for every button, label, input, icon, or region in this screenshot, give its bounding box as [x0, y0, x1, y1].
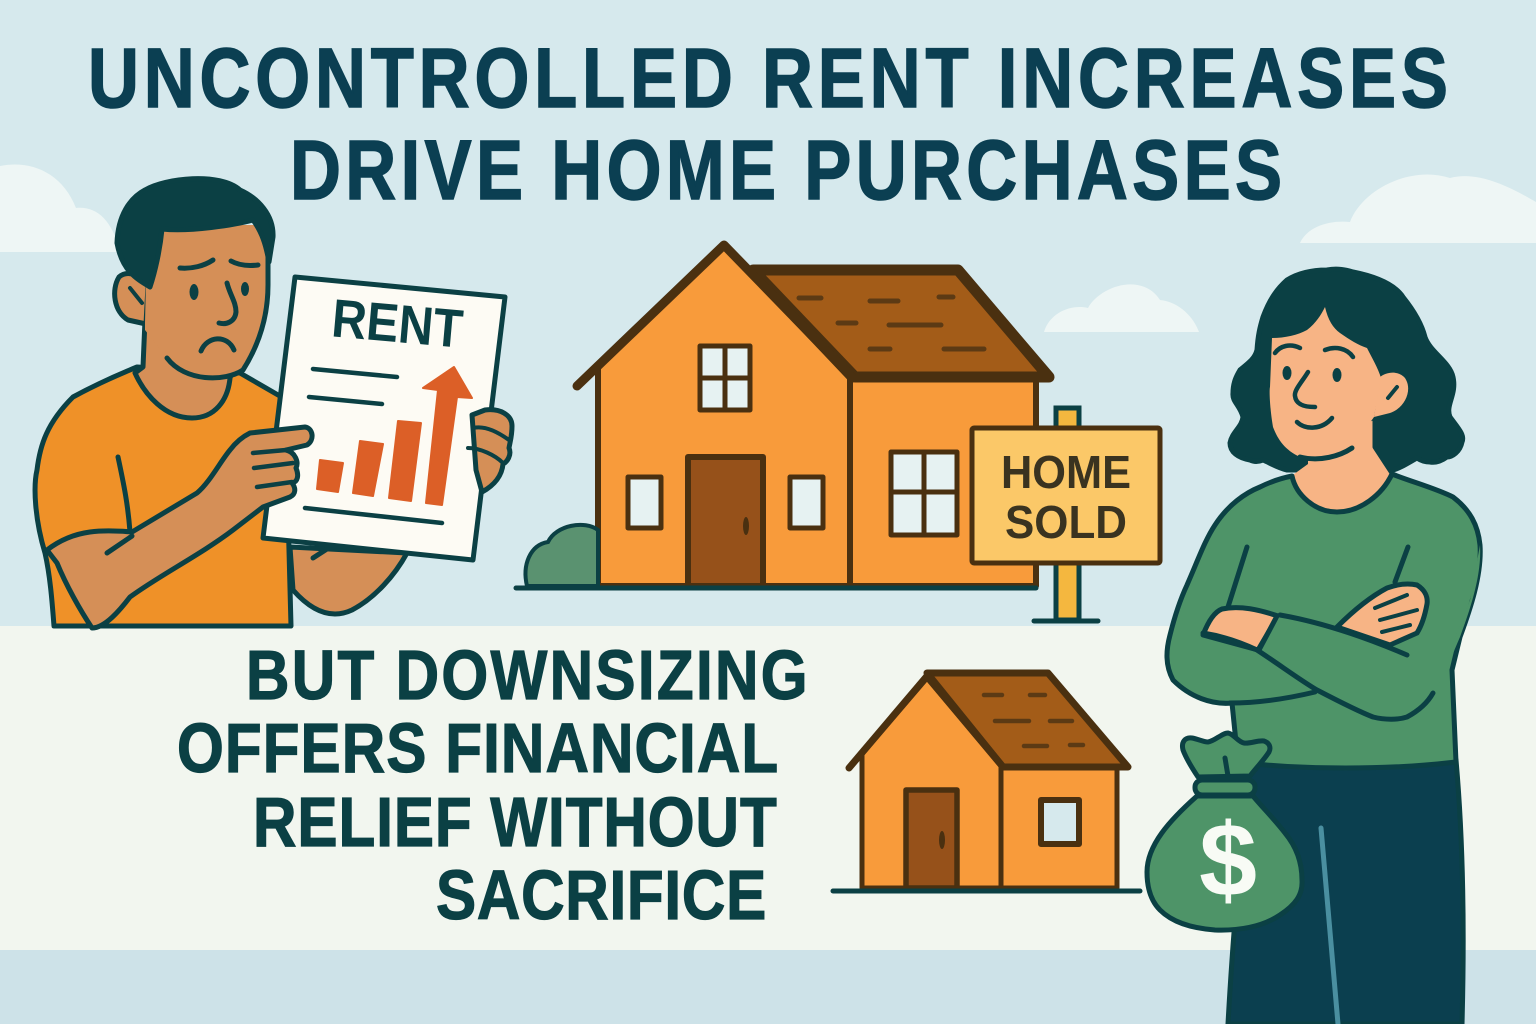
- woman: sweater: [1167, 474, 1480, 768]
- house: wing window: [891, 452, 957, 535]
- woman: trouser seam: [1321, 828, 1338, 1024]
- house: roof shingles: [799, 297, 984, 349]
- house: attic window: [700, 346, 750, 410]
- small house: front wall: [862, 678, 1001, 888]
- money bag: tuft: [1182, 733, 1270, 777]
- woman: right hand: [1337, 584, 1427, 645]
- house: gable trim: [577, 245, 853, 386]
- man: face: [180, 260, 258, 351]
- man: far arm: [290, 547, 407, 614]
- woman: crossed arm: [1203, 545, 1480, 719]
- house: right window: [790, 477, 823, 528]
- woman: ear: [1374, 373, 1408, 417]
- cloud: left: [0, 165, 120, 252]
- small house ground line: [833, 888, 1140, 894]
- money bag: dollar sign: $: [1199, 803, 1257, 919]
- small house: door: [906, 790, 957, 888]
- document: bar chart: [317, 367, 472, 505]
- woman: left hand: [1203, 608, 1278, 650]
- woman: trousers: [1228, 760, 1463, 1024]
- subtitle: RELIEF WITHOUT: [253, 783, 777, 861]
- cloud: right: [1300, 174, 1536, 243]
- house: right wing wall: [850, 375, 1036, 586]
- house: left window: [628, 477, 661, 528]
- woman: hair: [1230, 269, 1463, 470]
- rent document: [263, 277, 505, 560]
- man: sleeve line: [118, 457, 130, 532]
- home sold sign: [972, 408, 1160, 621]
- bush: [526, 525, 598, 586]
- small house: gable trim: [849, 676, 1003, 768]
- title: UNCONTROLLED RENT INCREASES: [88, 32, 1448, 125]
- small house: window: [1041, 800, 1079, 844]
- man: head: [145, 225, 268, 377]
- document: RENT label: RENT: [329, 288, 465, 360]
- band: lower text background: [0, 626, 1536, 950]
- money bag: body: [1147, 796, 1302, 930]
- house: roof: [753, 270, 1049, 377]
- woman: sleeve lines: [1228, 547, 1408, 607]
- house: door: [688, 457, 763, 586]
- subtitle: SACRIFICE: [436, 856, 766, 934]
- man: pointing arm: [47, 427, 312, 628]
- money bag: [1147, 733, 1302, 930]
- small house: shingles: [984, 695, 1083, 746]
- man: hair: [117, 179, 273, 287]
- cloud: middle: [1044, 284, 1199, 332]
- subtitle: BUT DOWNSIZING: [246, 636, 808, 714]
- ground line: [516, 586, 1036, 590]
- title: DRIVE HOME PURCHASES: [290, 124, 1282, 217]
- house: small: [849, 673, 1128, 888]
- small house: roof: [927, 673, 1128, 767]
- man: shirt: [35, 367, 291, 626]
- woman: face: [1270, 307, 1381, 459]
- sign: board: [972, 428, 1160, 563]
- sign: post: [1056, 408, 1079, 620]
- subtitle: OFFERS FINANCIAL: [177, 709, 778, 787]
- woman: [1167, 269, 1480, 1024]
- home sold sign: SOLD: [1005, 496, 1127, 548]
- house: front wall: [598, 245, 850, 586]
- subtitle: [177, 636, 808, 934]
- title: [88, 32, 1448, 217]
- man: ear: [115, 274, 148, 324]
- woman: neck: [1290, 420, 1392, 512]
- small house: walls: [1001, 767, 1117, 888]
- money bag: band: [1195, 780, 1255, 795]
- house: large: [577, 245, 1049, 586]
- man: neck: [135, 320, 240, 418]
- sign: text: HOME: [1001, 446, 1131, 498]
- man with rent document: [35, 179, 407, 626]
- man: hand holding document: [468, 410, 512, 492]
- document: text lines: [305, 369, 442, 523]
